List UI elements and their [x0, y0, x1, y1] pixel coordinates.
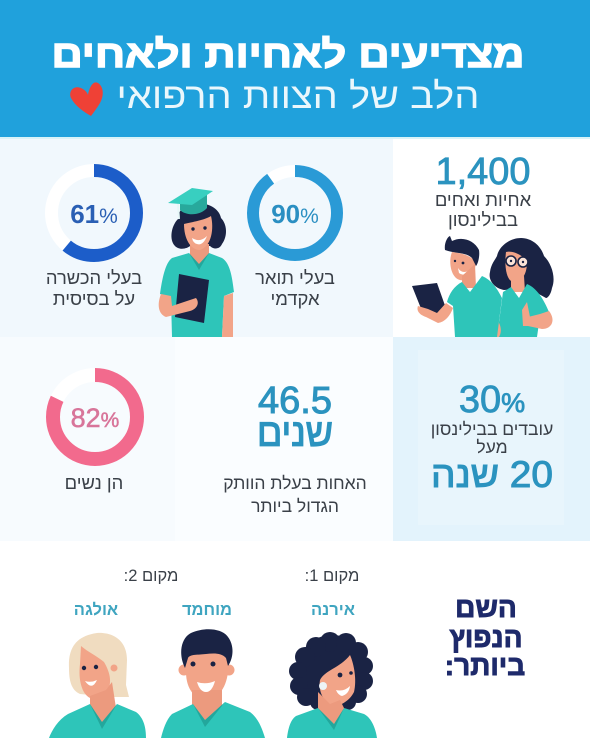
label: nurses at Beilinson: בבילינסון: [448, 209, 518, 230]
label: most senior nurse: הגדול ביותר: [251, 496, 339, 516]
label: 90 percent: [255, 267, 335, 309]
donut: 82 percent: 82%: [71, 403, 119, 433]
label: nurses at Beilinson: [435, 189, 532, 230]
donut: 90 percent: [253, 171, 337, 255]
label: working over: מעל: [476, 437, 508, 457]
heading: most common name: הנפוץ: [449, 622, 523, 653]
donut: 82 percent: [53, 375, 137, 459]
label: 61 percent: על בסיסית: [53, 288, 135, 309]
stat: 46.5 years: 46.5: [258, 380, 332, 422]
name: Irena: אירנה: [311, 601, 355, 619]
name: Olga: אולגה: [74, 601, 118, 619]
donut: 61 percent: 61%: [70, 199, 118, 229]
label: place 2: מקום 2:: [124, 567, 178, 585]
panel: over 20 years: [393, 337, 590, 541]
donut: 90 percent: 90%: [271, 199, 319, 229]
stat: 46.5 years: שנים: [257, 412, 333, 455]
stat: 20 years: 20 שנה: [431, 454, 553, 495]
subtitle: הלב של הצוות הרפואי: [116, 75, 480, 116]
donut: 61 percent: [52, 170, 136, 256]
label: place 1: מקום 1:: [305, 567, 359, 585]
stat: 46.5 years: [257, 380, 333, 455]
label: 90 percent: אקדמי: [270, 288, 320, 309]
label: 90 percent: בעלי תואר: [255, 267, 335, 288]
stat: 30 percent: 30%: [459, 379, 525, 421]
label: women: הן נשים: [65, 472, 123, 493]
name: Muhammad: מוחמד: [182, 601, 232, 619]
label: working over: עובדים בבילינסון: [431, 419, 553, 439]
label: nurses at Beilinson: אחיות ואחים: [435, 189, 532, 210]
icon: Irena: [287, 632, 377, 738]
label: working over: [431, 419, 553, 457]
heading: most common name: השם: [455, 592, 517, 623]
panel: common names: [49, 567, 525, 738]
icon: heart: [70, 82, 103, 116]
label: most senior nurse: האחות בעלת הוותק: [223, 473, 367, 493]
label: 61 percent: [46, 267, 142, 309]
stat: 1,400: 1,400: [435, 151, 531, 193]
heading: most common name: ביותר:: [445, 650, 525, 681]
heading: most common name: [445, 592, 525, 681]
panel: total nurses: [393, 139, 590, 337]
panel: women and seniority: [0, 337, 393, 541]
icon: graduate nurse: [159, 188, 234, 337]
icon: Muhammad: [161, 629, 265, 738]
label: 61 percent: בעלי הכשרה: [46, 267, 142, 288]
icon: Olga: [49, 633, 146, 738]
panel: header: [0, 0, 590, 139]
title: מצדיעים לאחיות ולאחים: [52, 34, 524, 76]
panel: education stats: [0, 139, 393, 337]
label: most senior nurse: [223, 473, 367, 516]
icon: two nurses: [412, 236, 554, 337]
